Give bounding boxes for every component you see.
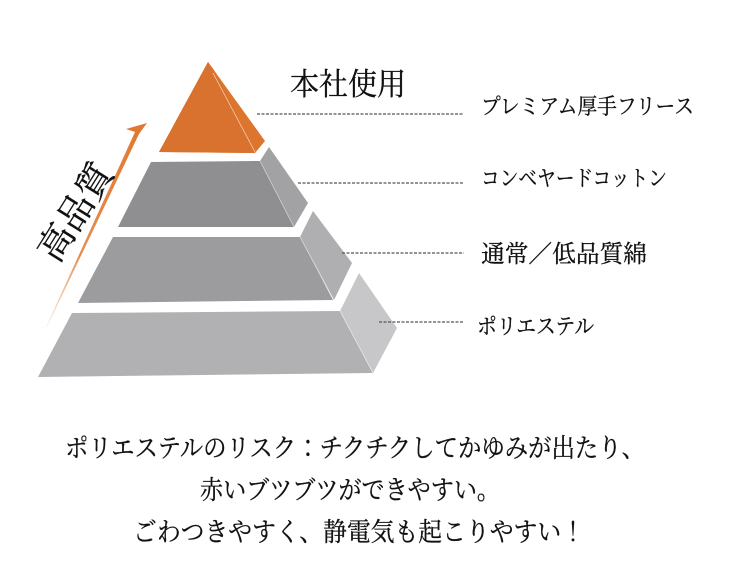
label: premium fleece: プレミアム厚手フリース [481,94,694,119]
pyramid tier 4: light grey base [38,273,397,377]
risk line 1: ポリエステルのリスク：チクチクしてかゆみが出たり、 [65,434,645,463]
label: regular low quality cotton: 通常／低品質綿 [481,241,647,268]
pyramid tier 2: dark grey [118,147,308,227]
arrow: quality rising [46,123,147,327]
leader line tier 3 [342,252,464,254]
risk line 2: 赤いブツブツができやすい。 [200,476,500,505]
label: polyester: ポリエステル [477,314,594,339]
label: conveyor cotton: コンベヤードコットン [481,166,667,191]
leader line tier 1 [257,113,464,115]
vertical label: high quality: 高品質 [30,154,123,268]
pyramid tier 3: mid grey [78,211,352,303]
risk line 3: ごわつきやすく、静電気も起こりやすい！ [133,518,585,547]
heading: used by our company: 本社使用 [290,67,406,102]
leader line tier 2 [298,182,464,184]
pyramid tier 1: orange top [159,62,265,153]
bottom text block [65,434,645,547]
leader line tier 4 [379,321,464,323]
